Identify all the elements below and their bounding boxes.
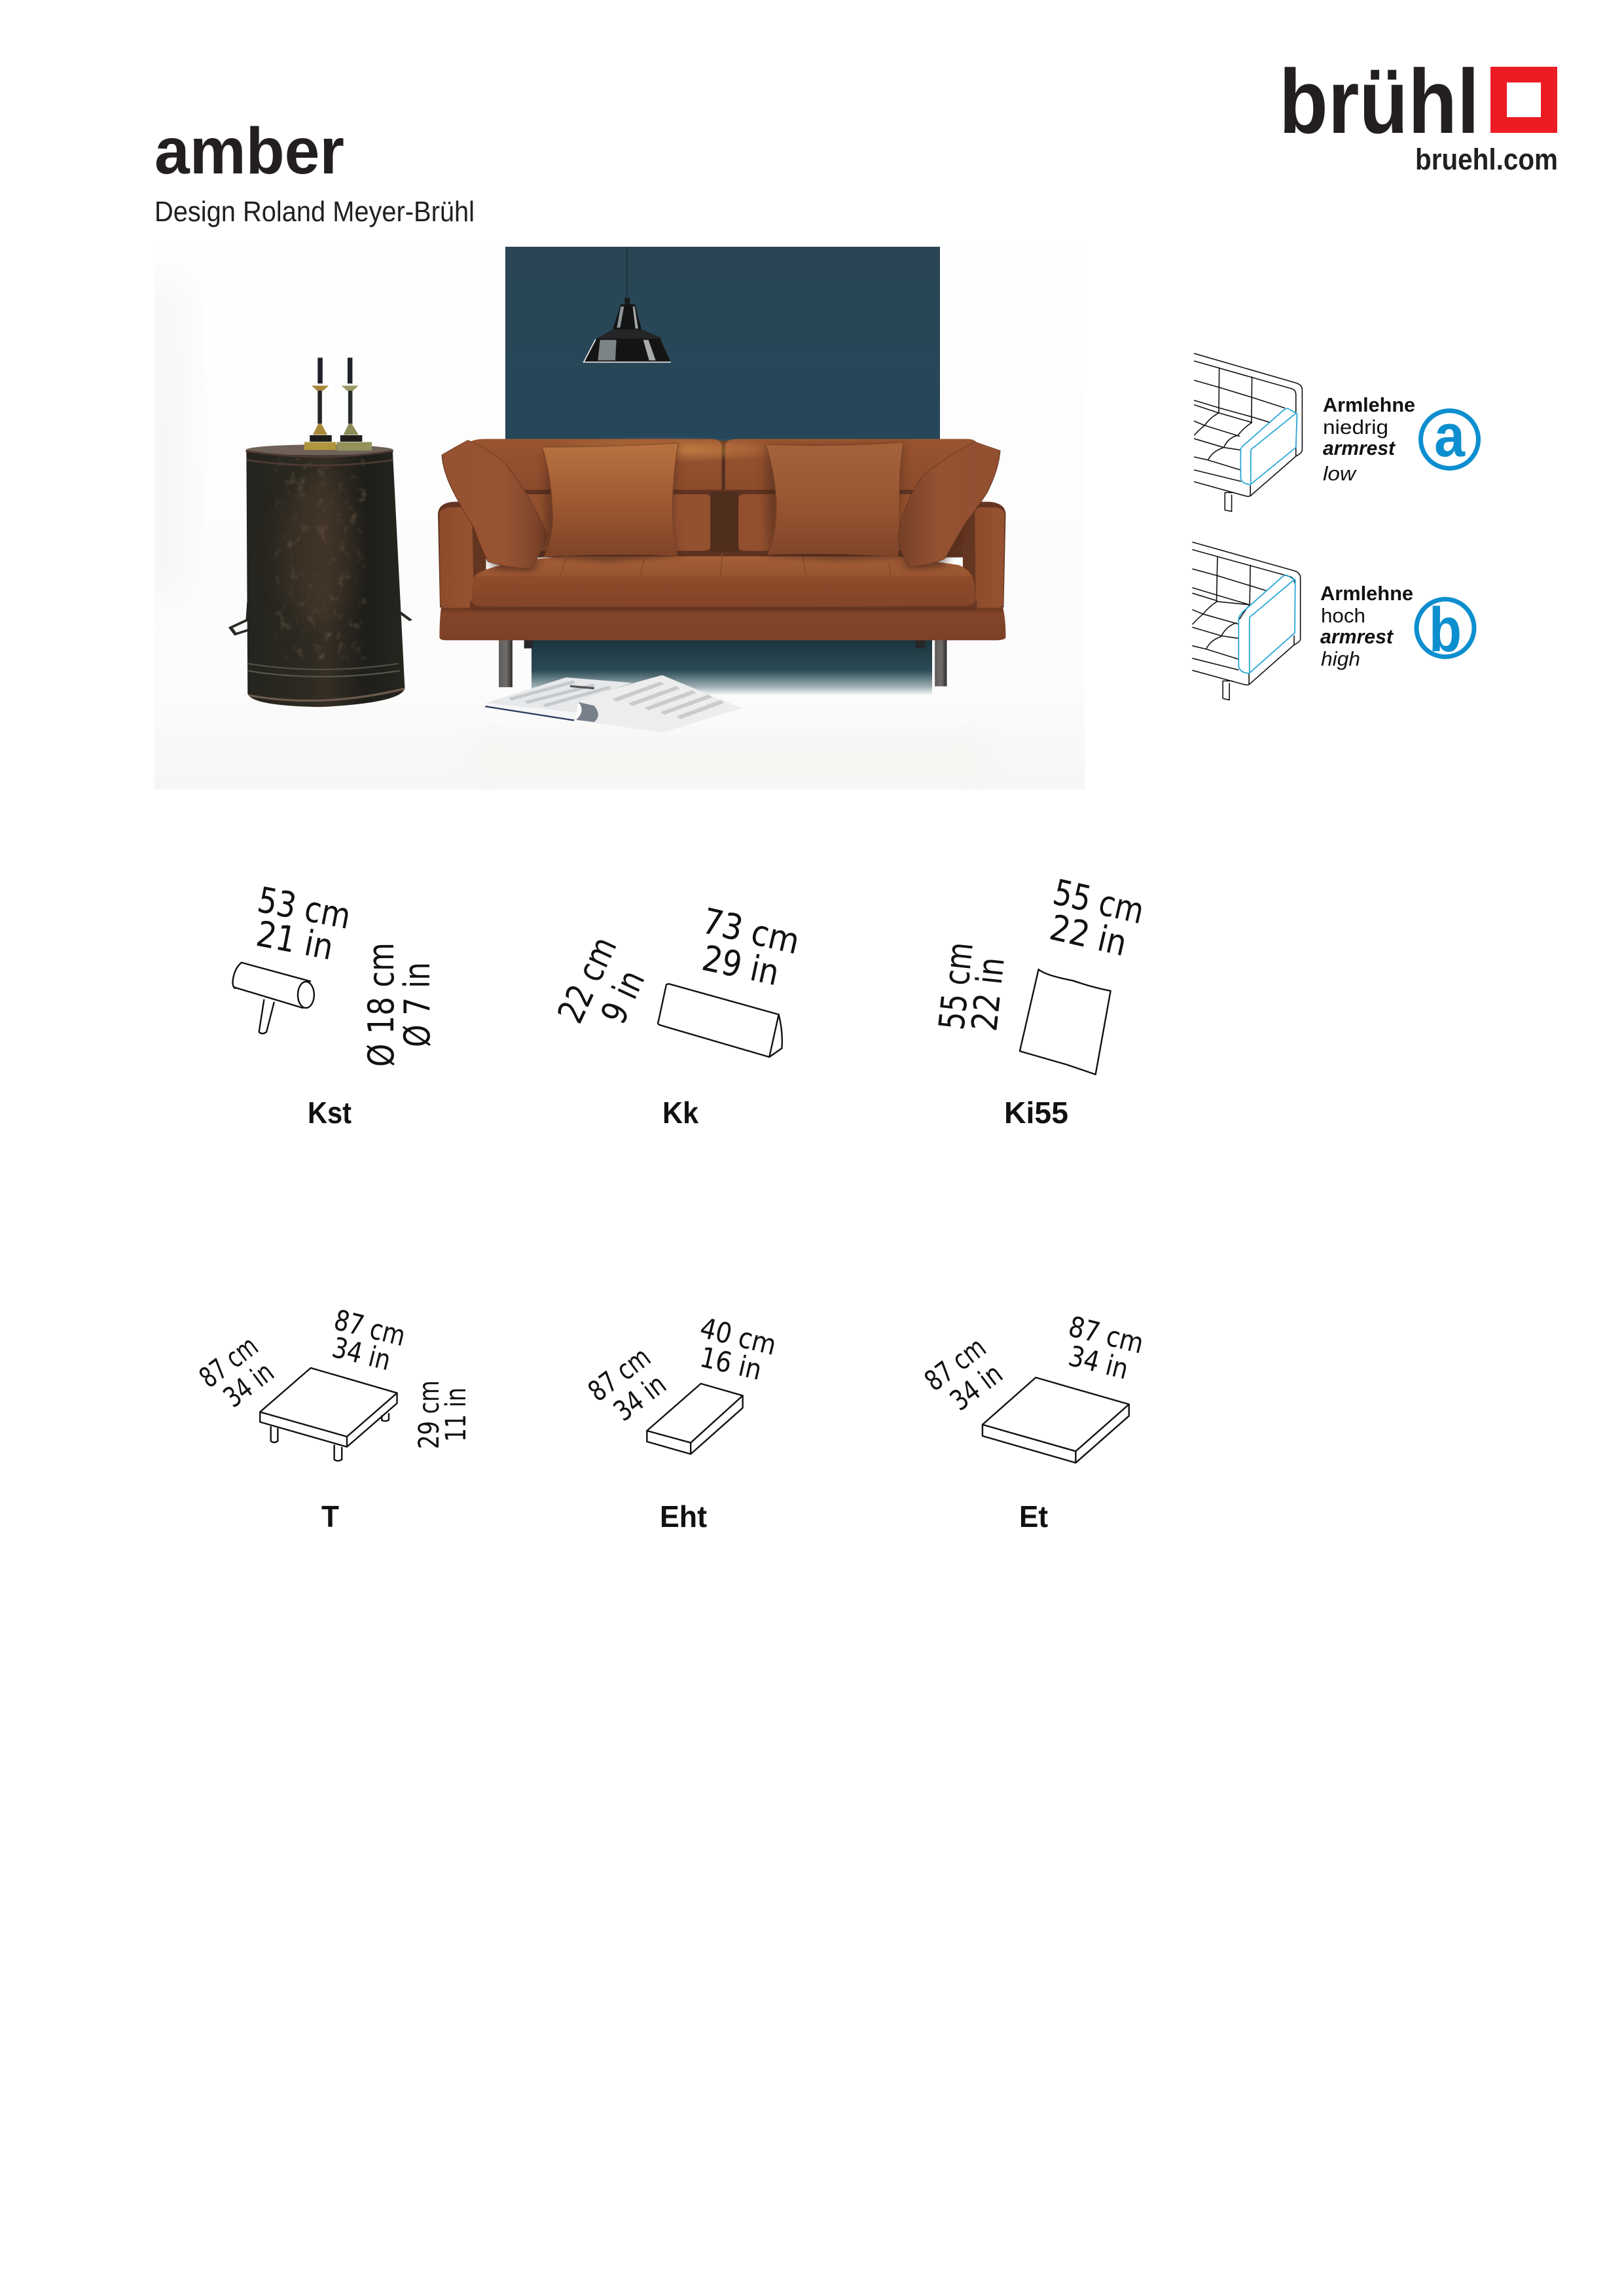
drum handles <box>230 601 411 634</box>
element: T table: 87 cm <box>331 1304 408 1353</box>
back cushion gap <box>719 440 728 493</box>
seat cushion front <box>472 576 975 607</box>
arms <box>438 502 486 607</box>
element: Eht half mattress: 16 in <box>697 1341 765 1387</box>
element: T table: 87 cm <box>194 1330 264 1395</box>
seat cushion top <box>475 556 971 576</box>
element: Kst neck roll: Ø 7 in <box>397 962 438 1047</box>
icon: sofa with high armrest <box>1193 542 1301 700</box>
element: Et pad: 34 in <box>1065 1340 1132 1386</box>
designer credit: Design Roland Meyer-Brühl <box>154 196 475 228</box>
element: Et pad: 87 cm <box>919 1331 992 1398</box>
element: Ki55 cushion: Ki55 <box>1004 1096 1068 1130</box>
pillow left <box>544 443 678 562</box>
element: Kk wedge cushion <box>550 900 803 1130</box>
icon: red square <box>1490 67 1557 133</box>
element: Kst neck roll <box>232 879 438 1130</box>
badge b <box>1416 595 1474 665</box>
element: Kst neck roll: Kst <box>308 1096 352 1130</box>
back cushions <box>471 439 721 490</box>
element: Kk wedge cushion: 9 in <box>593 964 653 1030</box>
title: amber <box>154 115 344 188</box>
label low armrest: niedrig <box>1323 416 1388 439</box>
icon: sofa with low armrest <box>1195 353 1302 511</box>
element: T table: T <box>321 1499 339 1534</box>
element: Ki55 cushion: 22 in <box>1046 906 1130 964</box>
floor reflection of wall <box>532 640 932 695</box>
element: Et pad: Et <box>1019 1499 1048 1534</box>
element: Eht half mattress: 40 cm <box>696 1312 780 1362</box>
side cushion right <box>898 442 1000 567</box>
element: Ki55 cushion <box>931 871 1148 1130</box>
logo: brühl with red square <box>1279 51 1558 176</box>
element: Kk wedge cushion: 73 cm <box>698 900 803 962</box>
element: Eht half mattress <box>583 1312 780 1534</box>
armrest option b <box>1193 542 1474 700</box>
sofa <box>438 437 1005 732</box>
element: T table: 29 cm <box>413 1380 446 1449</box>
label low armrest: armrest <box>1323 437 1396 459</box>
element: Et pad: 34 in <box>945 1357 1009 1418</box>
teal back wall panel <box>505 247 940 456</box>
pendant lamp <box>584 247 671 362</box>
element: Eht half mattress: 87 cm <box>583 1341 657 1408</box>
element: Kk wedge cushion: 29 in <box>698 937 783 994</box>
logo: brühl with red square: brühl <box>1279 51 1479 152</box>
element: Eht half mattress: 34 in <box>608 1368 672 1428</box>
icon: wedge cushion <box>658 984 782 1057</box>
element: Ki55 cushion: 55 cm <box>1049 871 1148 932</box>
label low armrest <box>1323 393 1415 485</box>
element: Ki55 cushion: 55 cm <box>931 941 981 1031</box>
element: T table: 34 in <box>329 1331 394 1377</box>
element: Ki55 cushion: 22 in <box>964 955 1013 1033</box>
icon: square pad <box>983 1378 1129 1463</box>
element: Et pad <box>919 1310 1147 1534</box>
element: T table <box>194 1304 473 1534</box>
label high armrest: hoch <box>1321 604 1365 627</box>
icon: neck roll <box>232 963 314 1033</box>
product photo: sofa scene <box>141 246 1085 789</box>
lower back bolsters <box>526 494 710 551</box>
website: bruehl.com <box>1415 143 1558 176</box>
candlesticks <box>304 357 372 451</box>
label high armrest: armrest <box>1320 625 1394 648</box>
icon: half pad <box>647 1384 743 1454</box>
pillow right <box>766 442 903 561</box>
icon: table <box>260 1368 397 1461</box>
seat gap shadow <box>470 601 977 610</box>
legs <box>499 637 947 687</box>
element: Et pad: 87 cm <box>1065 1310 1147 1361</box>
label low armrest: Armlehne <box>1323 393 1415 416</box>
element: T table: 11 in <box>440 1388 473 1442</box>
element: Kst neck roll: Ø 18 cm <box>361 942 402 1067</box>
side cushion left <box>442 440 547 568</box>
label high armrest: Armlehne <box>1320 582 1413 605</box>
metal drum side table <box>230 357 411 707</box>
side cushion shadow <box>466 471 983 571</box>
armrest option a <box>1195 353 1478 511</box>
badge a: a <box>1434 403 1466 469</box>
element: Kst neck roll: 21 in <box>253 913 336 968</box>
icon: square cushion <box>1020 969 1111 1075</box>
label high armrest: high <box>1321 647 1360 670</box>
top light glow <box>563 437 766 460</box>
badge a <box>1420 403 1478 469</box>
sofa base <box>439 607 1005 640</box>
element: T table: 34 in <box>218 1356 280 1414</box>
element: Kst neck roll: 53 cm <box>255 879 354 937</box>
element: Kk wedge cushion: 22 cm <box>550 931 625 1029</box>
label low armrest: low <box>1323 462 1358 485</box>
book <box>485 675 742 732</box>
badge b: b <box>1429 595 1462 665</box>
element: Eht half mattress: Eht <box>660 1499 707 1534</box>
element: Kk wedge cushion: Kk <box>662 1096 698 1130</box>
label high armrest <box>1320 582 1413 670</box>
